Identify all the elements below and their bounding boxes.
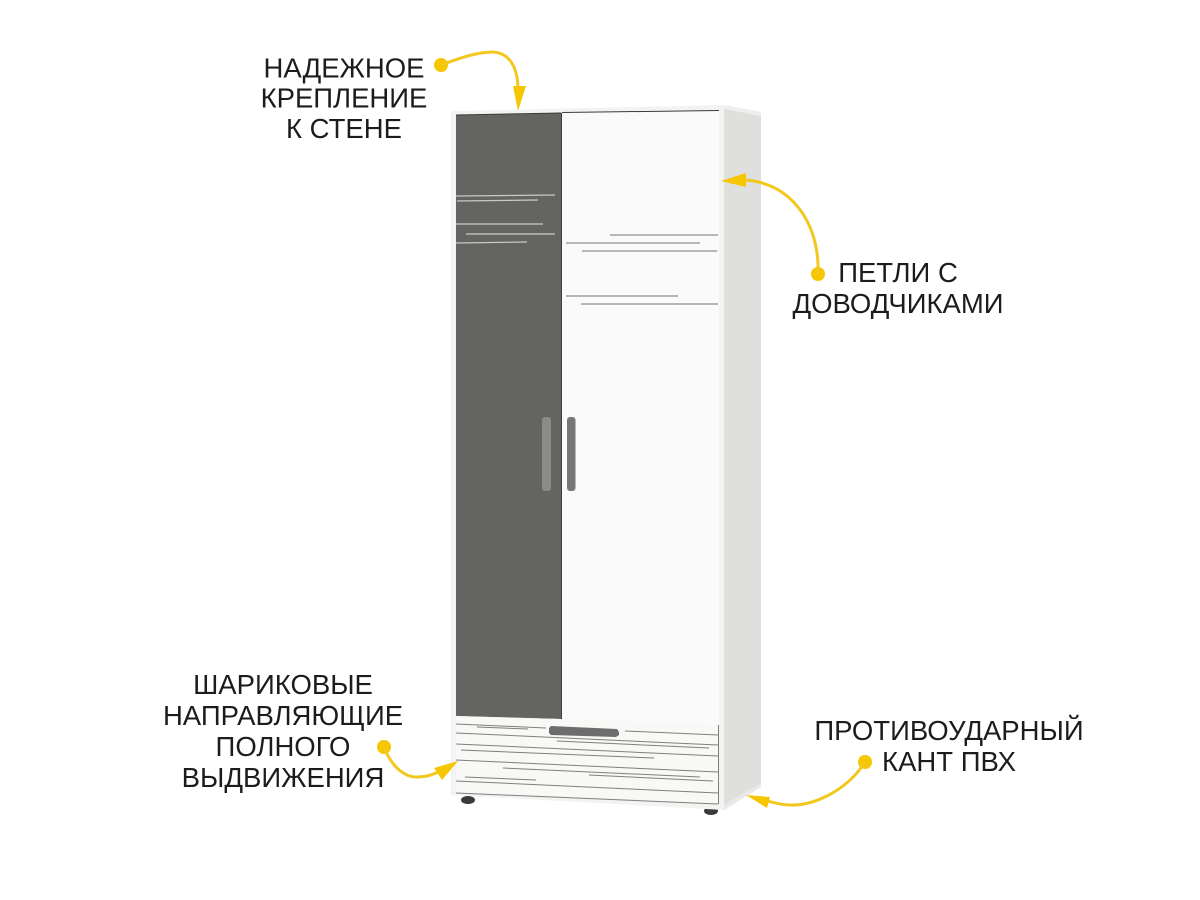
feet [461,796,718,815]
dark door lines [456,195,555,243]
label: wall mount: НАДЕЖНОЕ [263,52,425,84]
label: drawer runners: ВЫДВИЖЕНИЯ [182,762,384,793]
label: drawer runners: ПОЛНОГО [216,731,350,762]
arrow: drawer runners [377,740,458,780]
label: wall mount: К СТЕНЕ [286,113,402,144]
white door [562,111,719,725]
door handles [542,417,576,491]
dark door [456,113,561,719]
arrow: hinges [721,173,825,281]
label: wall mount: КРЕПЛЕНИЕ [261,82,427,114]
drawer handle [549,726,619,737]
label: drawer runners: НАПРАВЛЯЮЩИЕ [163,700,403,731]
wardrobe [451,105,761,815]
white door lines [566,235,718,304]
label: PVC edge: КАНТ ПВХ [882,746,1016,777]
label: drawer runners: ШАРИКОВЫЕ [193,669,373,700]
label: PVC edge: ПРОТИВОУДАРНЫЙ [814,715,1084,746]
drawer [456,716,719,804]
label: hinges: ПЕТЛИ С [838,257,958,288]
arrow: PVC edge [746,755,872,808]
drawer lines [456,724,718,804]
arrow: wall mount [434,52,526,111]
cabinet front frame [451,105,724,810]
label: hinges: ДОВОДЧИКАМИ [792,288,1004,319]
cabinet side panel [724,105,761,810]
